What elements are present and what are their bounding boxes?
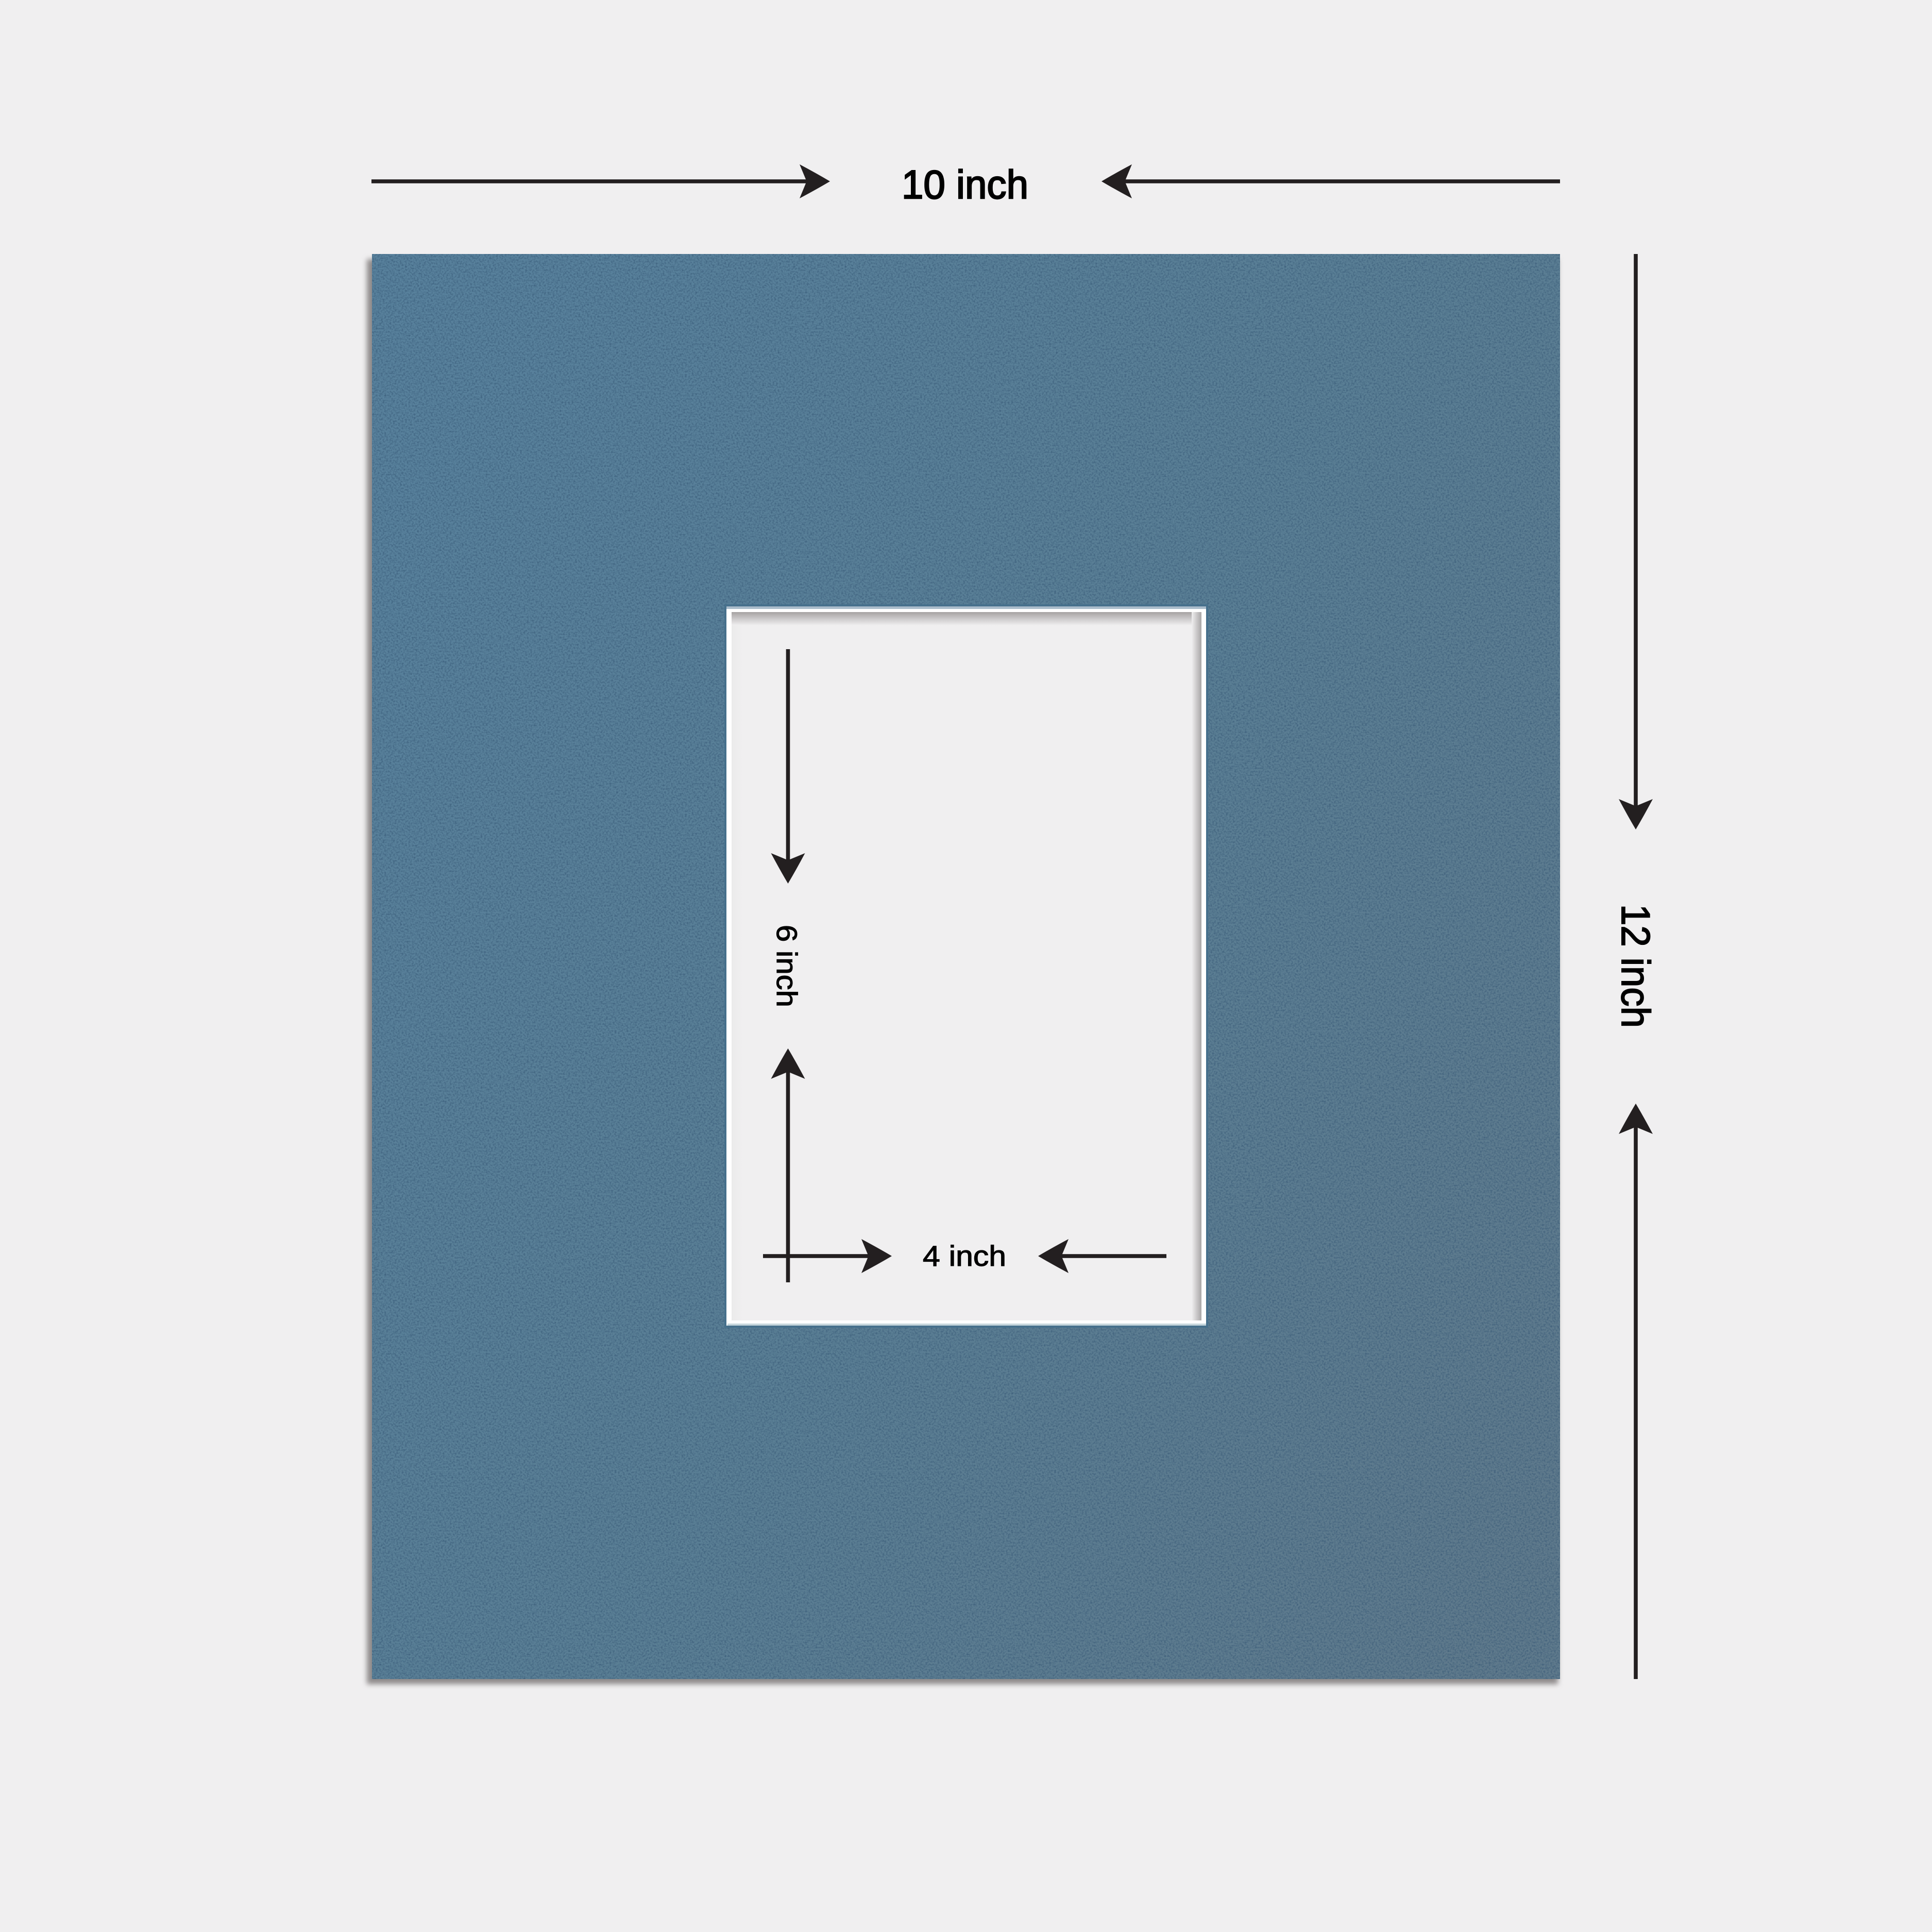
window bevel top strip	[726, 606, 1206, 609]
arrow: right lower	[1619, 1104, 1653, 1679]
arrow: window vertical lower	[771, 1048, 805, 1282]
mat board shadow	[367, 259, 1558, 1684]
label: 4 inch: 4 inch	[923, 1240, 1006, 1272]
arrow: window horizontal left	[763, 1239, 892, 1273]
label: 6 inch: 6 inch	[771, 925, 803, 1007]
mat board paper texture	[372, 254, 1560, 1679]
window bevel bottom strip	[727, 1324, 1206, 1326]
label: 10 inch: 10 inch	[902, 162, 1028, 207]
arrow: window horizontal right	[1038, 1239, 1166, 1273]
arrow: right upper	[1619, 254, 1653, 829]
window inner top shadow	[732, 612, 1201, 625]
window inner left shadow	[732, 612, 743, 1320]
label: 12 inch: 12 inch	[1613, 904, 1658, 1028]
window inner right shadow	[1192, 612, 1201, 1320]
panel: window opening	[724, 604, 1208, 1328]
mat board surface	[372, 254, 1560, 1679]
window outer dark edge	[724, 604, 1208, 1328]
arrow: window vertical upper	[771, 649, 805, 884]
panel: mat board	[367, 254, 1560, 1684]
arrow: top left	[371, 164, 830, 198]
window bevel	[726, 606, 1206, 1326]
window inner opening	[732, 612, 1201, 1320]
arrow: top right	[1101, 164, 1560, 198]
